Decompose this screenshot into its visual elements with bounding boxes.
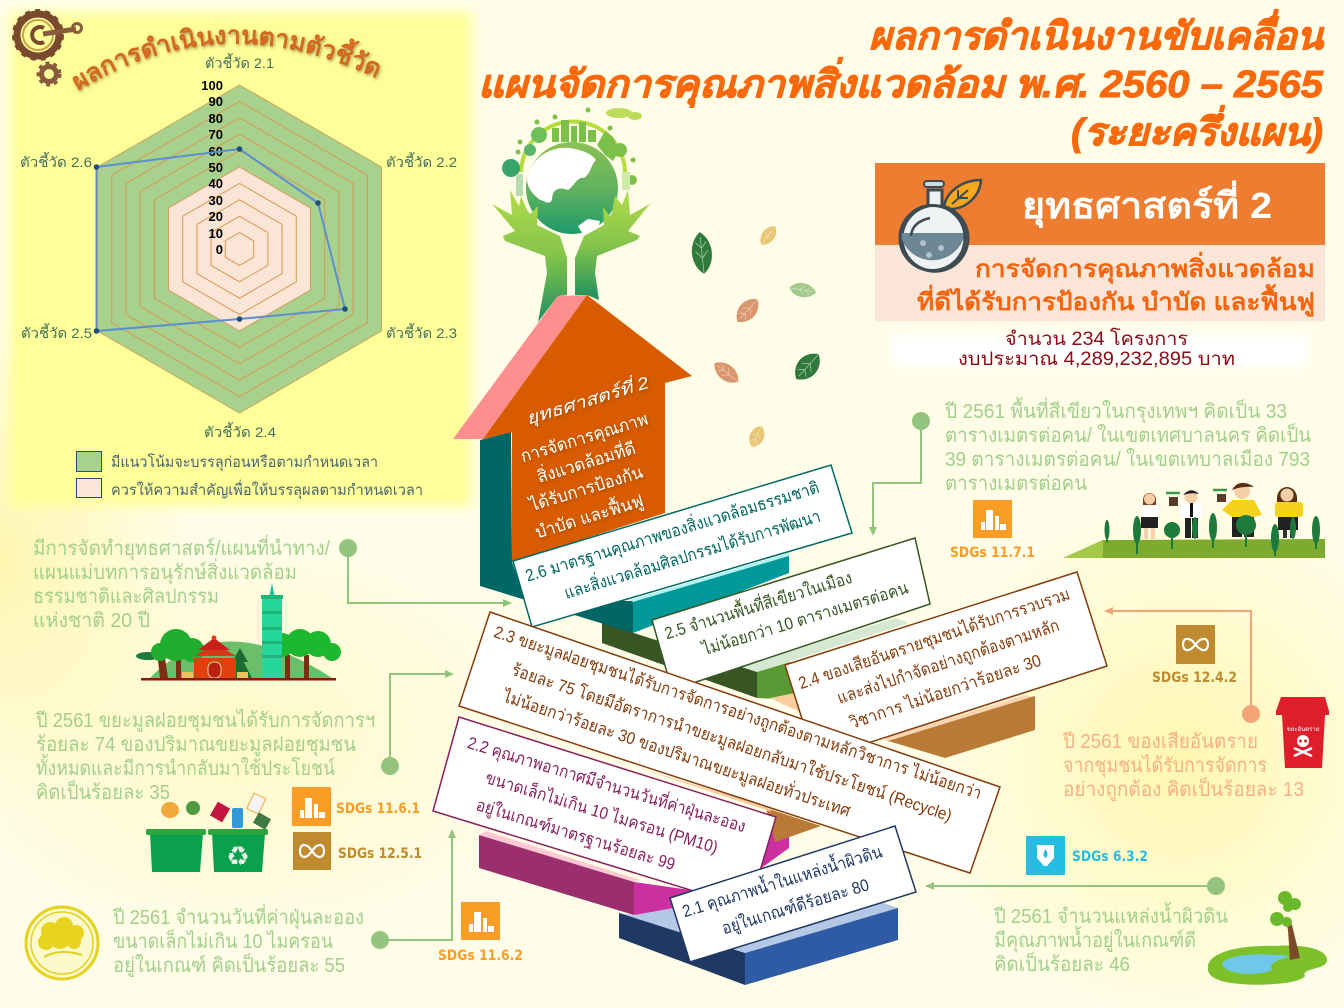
house text: การจัดการคุณภาพ [518, 409, 651, 467]
radar: axis labels: ตัวชี้วัด 2.1 [205, 53, 274, 71]
text block: community waste: ร้อยละ 74 ของปริมาณขยะมูลฝอยชุมชน [36, 734, 356, 757]
box: indicator 2.2 [433, 717, 776, 908]
title: (ระยะครึ่งแผน) [1071, 105, 1323, 154]
text block: strategy and roadmap: มีการจัดทำยุทธศาสตร์/แผนที่นำทาง/ [33, 534, 330, 561]
budget summary [892, 327, 1308, 370]
icon: recycling bins [146, 793, 271, 872]
heading: radar chart title on arc: ผลการดำเนินงานตามตัวชี้วัด [72, 26, 383, 94]
text block: surface water [994, 902, 1228, 976]
icon: falling leaves [690, 223, 829, 450]
leaf: tan top [754, 223, 780, 251]
panel: strategy 2 banner [875, 163, 1325, 321]
legend: มีแนวโน้มจะบรรลุก่อนหรือตามกำหนดเวลา [111, 453, 378, 472]
title: แผนจัดการคุณภาพสิ่งแวดล้อม พ.ศ. 2560 – 2565 [478, 57, 1324, 108]
text block: community waste: คิดเป็นร้อยละ 35 [36, 779, 170, 804]
radar: axis labels: ตัวชี้วัด 2.5 [21, 323, 92, 341]
icon: red hazardous bin [1276, 697, 1329, 768]
icon: SDG 12.4.2 [1176, 625, 1215, 664]
house text: สิ่งแวดล้อมที่ดี [534, 436, 638, 487]
radar: data series [94, 146, 348, 334]
left hand [492, 190, 567, 322]
teal light strip [630, 553, 789, 602]
connector: water to indicator 2.1 [925, 877, 1225, 895]
text block: surface water: ปี 2561 จำนวนแหล่งน้ำผิวดิน [994, 902, 1228, 928]
text block: dust particles: ขนาดเล็กไม่เกิน 10 ไมครอน [113, 928, 333, 953]
radar: axis labels: ตัวชี้วัด 2.3 [386, 323, 457, 341]
text block: dust particles [113, 903, 364, 978]
ground [1063, 539, 1325, 558]
title [478, 9, 1325, 154]
text block: dust particles: ปี 2561 จำนวนวันที่ค่าฝุ่นละออง [113, 903, 364, 930]
box: indicator 2.3: ร้อยละ 75 โดยมีอัตราการนำขยะมูลฝอยกลับมาใช้ประโยชน์ (Recycle) [509, 659, 955, 826]
box: indicator 2.2: อยู่ในเกณฑ์มาตรฐานร้อยละ 99 [474, 794, 678, 875]
text block: hazardous waste [1063, 731, 1304, 802]
icon: people planting trees [1063, 483, 1325, 558]
legend [76, 452, 423, 500]
icon: SDG 11.6.2 [461, 902, 500, 940]
radar: scale numbers: 100 [201, 78, 223, 93]
radar chart [20, 53, 457, 440]
text block: strategy and roadmap: แผนแม่บทการอนุรักษ์สิ่งแวดล้อม [33, 558, 297, 585]
text block: green space: ตารางเมตรต่อคน/ ในเขตเทศบาลนคร คิดเป็น [945, 422, 1311, 447]
label: SDGs 11.6.1: SDGs 11.6.1 [336, 801, 420, 817]
box: indicator 2.4 [785, 572, 1107, 760]
text block: dust particles: อยู่ในเกณฑ์ คิดเป็นร้อยละ 55 [113, 952, 345, 978]
box: indicator 2.5: ไม่น้อยกว่า 10 ตารางเมตรต่อคน [698, 577, 911, 660]
box: indicator 2.2: 2.2 คุณภาพอากาศมีจำนวนวันที่ค่าฝุ่นละออง [465, 730, 749, 837]
box: indicator 2.5: 2.5 จำนวนพื้นที่สีเขียวในเมือง [661, 565, 854, 643]
icon: golden cloud emblem [26, 907, 98, 979]
leaf: brown [731, 290, 767, 328]
box: indicator 2.6: 2.6 มาตรฐานคุณภาพของสิ่งแวดล้อมธรรมชาติ [522, 475, 822, 587]
icon: temple, tower and trees [136, 583, 341, 680]
box: indicator 2.5 [652, 538, 930, 690]
text block: green space: 39 ตารางเมตรต่อคน/ ในเขตเทบาลเมือง 793 [945, 448, 1310, 471]
panel: strategy 2 banner: ที่ดีได้รับการป้องกัน บำบัด และฟื้นฟู [917, 283, 1315, 317]
radar: scale numbers: 30 [209, 193, 223, 208]
house text: ยุทธศาสตร์ที่ 2 [523, 370, 652, 429]
icon: SDG 12.5.1 [293, 832, 331, 870]
text block: community waste: ทั้งหมดและมีการนำกลับมาใช้ประโยชน์ [36, 754, 335, 780]
radar: scale numbers: 10 [209, 226, 223, 241]
connector: hazardous waste to indicator 2.4 [1104, 607, 1260, 723]
text block: green space [945, 397, 1311, 495]
radar: pink zone [168, 167, 310, 331]
box: indicator 2.3: ไม่น้อยกว่าร้อยละ 30 ของปริมาณขยะมูลฝอยทั่วประเทศ [499, 683, 854, 822]
diagram: brown layer 2.3 [612, 695, 1035, 842]
box: indicator 2.3 [459, 612, 1000, 873]
icon: globe held by hands [492, 108, 650, 322]
text block: hazardous waste: ปี 2561 ของเสียอันตราย [1063, 731, 1258, 753]
text block: surface water: มีคุณภาพน้ำอยู่ในเกณฑ์ดี [994, 926, 1196, 953]
house side wall [480, 432, 633, 633]
box: indicator 2.4: 2.4 ของเสียอันตรายชุมชนได้รับการรวบรวม [796, 584, 1073, 694]
text block: strategy and roadmap: ธรรมชาติและศิลปกรรม [33, 586, 219, 608]
connector: roadmap to indicator 2.6 [339, 539, 512, 607]
radar: axis labels [20, 53, 457, 440]
radar: scale numbers: 0 [216, 242, 223, 257]
city and nature ring [502, 108, 642, 196]
globe [526, 142, 618, 234]
person 2 [1166, 490, 1227, 538]
budget summary: งบประมาณ 4,289,232,895 บาท [958, 349, 1235, 370]
text block: green space: ปี 2561 พื้นที่สีเขียวในกรุงเทพฯ คิดเป็น 33 [945, 397, 1287, 424]
radar: scale numbers: 50 [209, 160, 223, 175]
icon: pond and tree [1208, 891, 1327, 985]
budget summary: จำนวน 234 โครงการ [1005, 327, 1188, 350]
radar: scale numbers [201, 78, 223, 257]
label: SDGs 11.7.1: SDGs 11.7.1 [950, 545, 1035, 561]
box: indicator 2.1 [670, 826, 916, 962]
text block: community waste: ปี 2561 ขยะมูลฝอยชุมชนได้รับการจัดการฯ [36, 709, 375, 733]
icon: flask with leaf [900, 180, 981, 271]
house text: ได้รับการป้องกัน [526, 461, 645, 516]
radar: scale numbers: 80 [209, 111, 223, 126]
leaf: green lower [789, 344, 829, 386]
connector: dust to indicator 2.2 [371, 829, 456, 949]
label: SDGs 12.5.1: SDGs 12.5.1 [338, 846, 422, 862]
text block: strategy and roadmap [33, 534, 330, 632]
radar: green zone [98, 85, 382, 413]
teal layer face [633, 555, 789, 633]
icon: SDG 11.6.1 [292, 787, 331, 826]
radar: scale numbers: 70 [209, 127, 223, 142]
person 3 [1222, 483, 1262, 537]
house text [518, 370, 652, 543]
connector: waste to indicator 2.3 [381, 670, 454, 775]
text block: community waste [36, 709, 375, 804]
panel: strategy 2 banner: การจัดการคุณภาพสิ่งแวดล้อม [975, 251, 1315, 285]
box: indicator 2.6: และสิ่งแวดล้อมศิลปกรรมได้รับการพัฒนา [561, 504, 823, 603]
label: SDGs 6.3.2: SDGs 6.3.2 [1072, 849, 1148, 865]
right hand [575, 190, 650, 300]
icon: red hazardous bin: ขยะอันตราย [1287, 726, 1319, 733]
panel: strategy 2 banner: ยุทธศาสตร์ที่ 2 [1022, 180, 1272, 229]
legend: ควรให้ความสำคัญเพื่อให้บรรลุผลตามกำหนดเวลา [111, 479, 423, 500]
text block: green space: ตารางเมตรต่อคน [945, 473, 1087, 495]
text block: strategy and roadmap: แห่งชาติ 20 ปี [33, 610, 150, 632]
diagram: green layer 2.5 [602, 618, 909, 712]
leaf: tan lower [746, 420, 769, 450]
radar: axis labels: ตัวชี้วัด 2.6 [20, 152, 92, 170]
text block: hazardous waste: จากชุมชนได้รับการจัดการ [1063, 754, 1267, 778]
box: indicator 2.4: และส่งไปกำจัดอย่างถูกต้องตามหลัก [834, 615, 1062, 709]
box: indicator 2.1: อยู่ในเกณฑ์ดีร้อยละ 80 [719, 874, 872, 939]
box: indicator 2.2: ขนาดเล็กไม่เกิน 10 ไมครอน (PM10) [483, 766, 721, 857]
icon: SDG 11.7.1 [973, 500, 1012, 538]
diagram: magenta layer 2.2 [479, 824, 789, 915]
box: indicator 2.4: วิชาการ ไม่น้อยกว่าร้อยละ 30 [846, 650, 1044, 733]
house roof [453, 295, 587, 439]
box: indicator 2.1: 2.1 คุณภาพน้ำในแหล่งน้ำผิวดิน [679, 839, 885, 922]
radar: scale numbers: 20 [209, 209, 223, 224]
diagram: teal layer 2.6 and house [453, 295, 789, 633]
text block: hazardous waste: อย่างถูกต้อง คิดเป็นร้อยละ 13 [1063, 776, 1304, 802]
house text: บำบัด และฟื้นฟู [532, 488, 646, 543]
person 4 [1275, 487, 1303, 538]
house front [483, 295, 692, 562]
icon: gears and wrench [14, 11, 82, 85]
connector: green space to indicator 2.5 [869, 412, 930, 536]
person 1 [1141, 493, 1158, 539]
radar: axis labels: ตัวชี้วัด 2.4 [204, 422, 276, 440]
label: SDGs 11.6.2: SDGs 11.6.2 [438, 948, 523, 964]
label: SDGs 12.4.2: SDGs 12.4.2 [1152, 670, 1237, 686]
leaf: dark green [690, 231, 715, 281]
title: ผลการดำเนินงานขับเคลื่อน [869, 9, 1325, 58]
icon: recycling bins: ♻ [228, 845, 248, 868]
box: indicator 2.3: 2.3 ขยะมูลฝอยชุมชนได้รับการจัดการอย่างถูกต้องตามหลักวิชาการ ไม่น้อยกว่า [491, 621, 984, 804]
radar: scale numbers: 90 [209, 94, 223, 109]
leaf: light green [784, 280, 817, 299]
radar: scale numbers: 40 [209, 176, 223, 191]
leaf: salmon [710, 357, 747, 391]
text block: surface water: คิดเป็นร้อยละ 46 [994, 951, 1130, 976]
radar: scale numbers: 60 [209, 144, 223, 159]
icon: SDG 6.3.2 [1026, 836, 1065, 875]
radar: axis labels: ตัวชี้วัด 2.2 [386, 152, 457, 170]
diagram: blue layer 2.1 [619, 893, 898, 985]
panel: radar chart background [10, 12, 472, 506]
